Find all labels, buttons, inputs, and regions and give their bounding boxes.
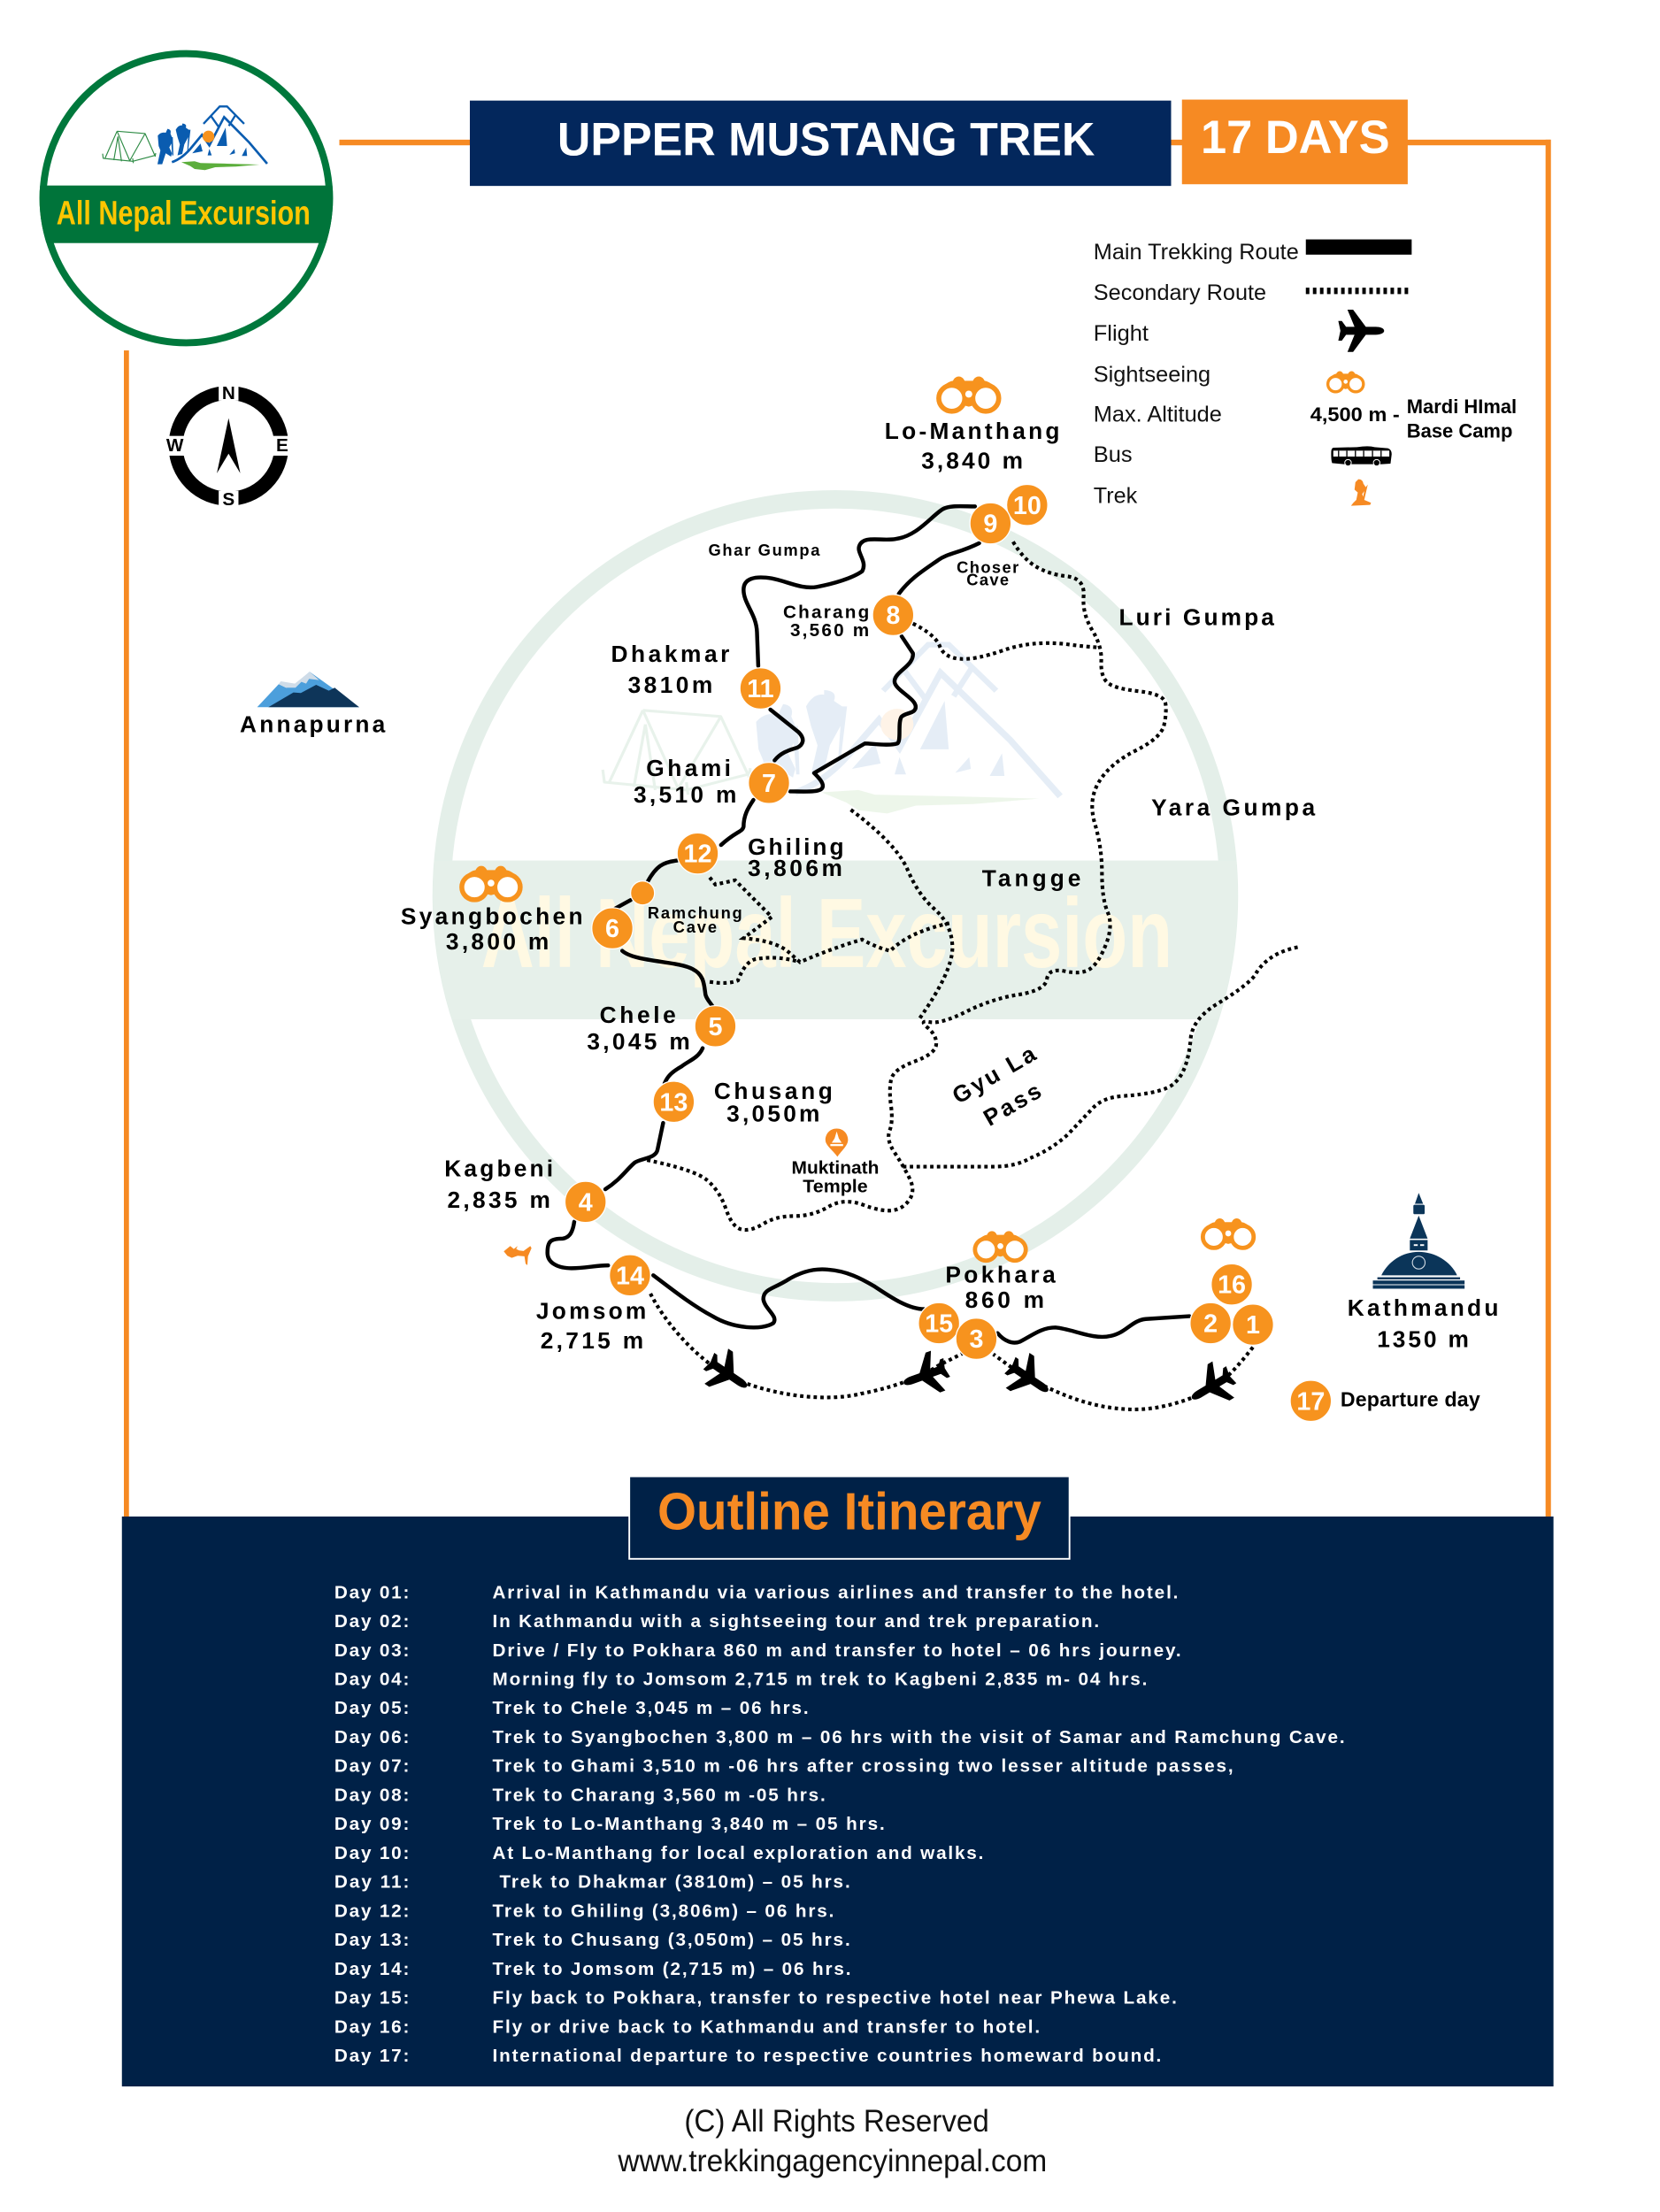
itinerary rows: Trek to Ghiling (3,806m) – 06 hrs. bbox=[493, 1901, 834, 1921]
map labels: Cave bbox=[673, 918, 717, 936]
watermark logo: All Nepal Excursion bbox=[481, 878, 1172, 988]
compass bbox=[165, 382, 290, 510]
itinerary rows: Day 02: bbox=[334, 1611, 409, 1632]
footer: www.trekkingagencyinnepal.com bbox=[617, 2144, 1047, 2178]
title banner bbox=[470, 101, 1171, 186]
itinerary rows: Trek to Chele 3,045 m – 06 hrs. bbox=[493, 1698, 809, 1718]
map labels: Gyu La bbox=[948, 1039, 1042, 1109]
map labels: Charang bbox=[783, 602, 869, 622]
duration badge bbox=[1182, 100, 1408, 184]
map labels: Dhakmar bbox=[611, 641, 729, 667]
map labels: Chele bbox=[600, 1002, 676, 1028]
map labels: 3,800 m bbox=[446, 928, 549, 955]
map labels: 2,835 m bbox=[447, 1187, 550, 1213]
itinerary rows: Day 04: bbox=[334, 1669, 409, 1689]
map labels: Lo-Manthang bbox=[885, 418, 1060, 444]
itinerary rows: Day 12: bbox=[334, 1901, 409, 1921]
map: secondary routes bbox=[645, 541, 1301, 1230]
map labels: 3810m bbox=[628, 672, 712, 698]
duration badge: 17 DAYS bbox=[1201, 111, 1390, 164]
icons: planes bbox=[697, 1343, 1242, 1417]
day markers: 4 bbox=[579, 1188, 593, 1217]
icon: Muktinath temple pin bbox=[826, 1129, 848, 1156]
map labels: 860 m bbox=[965, 1286, 1044, 1313]
map labels: Departure day bbox=[1341, 1388, 1480, 1411]
day markers: 14 bbox=[616, 1262, 644, 1290]
itinerary rows: Trek to Syangbochen 3,800 m – 06 hrs with the visit of Samar and Ramchung Cave. bbox=[493, 1727, 1345, 1747]
compass: S bbox=[222, 489, 234, 510]
compass: E bbox=[276, 435, 288, 456]
logo: All Nepal Excursion bbox=[36, 54, 336, 342]
itinerary rows: Day 10: bbox=[334, 1843, 409, 1863]
itinerary rows: Trek to Lo-Manthang 3,840 m – 05 hrs. bbox=[493, 1814, 885, 1834]
legend: Secondary Route bbox=[1094, 281, 1266, 305]
orange frame lines bbox=[124, 140, 1551, 1517]
day markers: 8 bbox=[886, 602, 900, 630]
map labels: Muktinath bbox=[792, 1158, 879, 1179]
map labels: Chusang bbox=[714, 1078, 833, 1104]
day markers: 11 bbox=[747, 675, 774, 703]
icon: bus bbox=[1331, 446, 1392, 466]
itinerary rows: Morning fly to Jomsom 2,715 m trek to Kagbeni 2,835 m- 04 hrs. bbox=[493, 1669, 1147, 1689]
day markers: 17 bbox=[1296, 1387, 1325, 1416]
itinerary heading: Outline Itinerary bbox=[657, 1482, 1041, 1540]
panel: outline itinerary bbox=[122, 1477, 1554, 2086]
itinerary rows: Day 11: bbox=[334, 1872, 409, 1893]
map labels: Tangge bbox=[982, 864, 1080, 891]
map labels: Yara Gumpa bbox=[1151, 795, 1315, 821]
map labels: 3,560 m bbox=[790, 620, 869, 641]
day markers: 13 bbox=[659, 1088, 688, 1117]
day markers: 5 bbox=[708, 1013, 722, 1041]
map labels bbox=[240, 418, 1480, 1411]
itinerary rows: Day 16: bbox=[334, 2016, 409, 2037]
legend bbox=[1094, 240, 1517, 508]
day markers bbox=[565, 485, 1332, 1422]
itinerary rows: Day 06: bbox=[334, 1727, 409, 1747]
map labels: Jomsom bbox=[536, 1298, 646, 1325]
itinerary rows: Fly back to Pokhara, transfer to respective hotel near Phewa Lake. bbox=[493, 1988, 1177, 2008]
itinerary rows bbox=[334, 1582, 1345, 2066]
day markers: 9 bbox=[983, 511, 997, 539]
day markers: 6 bbox=[605, 915, 619, 943]
compass: N bbox=[222, 383, 235, 403]
itinerary rows: Day 09: bbox=[334, 1814, 409, 1834]
legend: Bus bbox=[1094, 443, 1133, 467]
itinerary heading bbox=[629, 1477, 1070, 1559]
itinerary rows: In Kathmandu with a sightseeing tour and trek preparation. bbox=[493, 1611, 1099, 1632]
footer bbox=[617, 2104, 1047, 2178]
icons: sightseeing binoculars bbox=[460, 376, 1255, 1261]
itinerary rows: Day 15: bbox=[334, 1988, 409, 2008]
logo: All Nepal Excursion: All Nepal Excursion bbox=[57, 195, 311, 233]
map labels: Pass bbox=[979, 1076, 1048, 1132]
day markers: 10 bbox=[1013, 492, 1041, 520]
itinerary rows: Day 17: bbox=[334, 2046, 409, 2066]
itinerary rows: Day 03: bbox=[334, 1640, 409, 1661]
footer: (C) All Rights Reserved bbox=[684, 2104, 989, 2139]
icon: Annapurna mountains bbox=[257, 672, 359, 707]
day markers: 3 bbox=[969, 1325, 983, 1354]
itinerary rows: Day 13: bbox=[334, 1930, 409, 1950]
compass: W bbox=[166, 435, 184, 456]
day markers: 7 bbox=[762, 770, 776, 798]
itinerary rows: Trek to Chusang (3,050m) – 05 hrs. bbox=[493, 1930, 850, 1950]
itinerary rows: Day 07: bbox=[334, 1756, 409, 1777]
itinerary rows: Day 01: bbox=[334, 1582, 409, 1602]
map: flight routes bbox=[650, 1294, 1253, 1409]
map labels: 3,510 m bbox=[634, 781, 736, 808]
map labels: Annapurna bbox=[240, 710, 386, 737]
map labels: 2,715 m bbox=[541, 1327, 643, 1354]
legend: 4,500 m - bbox=[1310, 403, 1400, 426]
legend: Sightseeing bbox=[1094, 363, 1210, 387]
itinerary rows: Trek to Jomsom (2,715 m) – 06 hrs. bbox=[493, 1959, 851, 1979]
map labels: 3,806m bbox=[748, 855, 842, 881]
map labels: Luri Gumpa bbox=[1118, 603, 1274, 630]
itinerary rows: Day 08: bbox=[334, 1785, 409, 1805]
itinerary rows: Day 05: bbox=[334, 1698, 409, 1718]
map labels: 3,840 m bbox=[921, 447, 1023, 473]
Kathmandu stupa and label: Kathmandu bbox=[1348, 1294, 1498, 1321]
map labels: Temple bbox=[803, 1176, 868, 1196]
day markers: 1 bbox=[1246, 1311, 1260, 1340]
icon: climber bbox=[503, 1246, 532, 1265]
title banner: UPPER MUSTANG TREK bbox=[557, 113, 1095, 165]
watermark logo bbox=[434, 499, 1237, 1292]
map labels: Cave bbox=[966, 571, 1009, 589]
itinerary rows: Trek to Dhakmar (3810m) – 05 hrs. bbox=[499, 1872, 850, 1893]
map labels: Ghiling bbox=[748, 833, 844, 860]
legend: Max. Altitude bbox=[1094, 403, 1222, 427]
legend: Mardi HImal bbox=[1407, 396, 1517, 418]
itinerary rows: Trek to Charang 3,560 m -05 hrs. bbox=[493, 1785, 826, 1805]
map labels: Ghami bbox=[646, 755, 731, 781]
map labels: Pokhara bbox=[945, 1261, 1056, 1287]
map labels: Ramchung bbox=[648, 903, 742, 922]
itinerary rows: International departure to respective countries homeward bound. bbox=[493, 2046, 1161, 2066]
map labels: Choser bbox=[957, 557, 1018, 576]
itinerary rows: Fly or drive back to Kathmandu and transfer to hotel. bbox=[493, 2016, 1040, 2037]
day markers: 2 bbox=[1203, 1310, 1218, 1339]
legend: Base Camp bbox=[1407, 419, 1512, 442]
itinerary rows: Trek to Ghami 3,510 m -06 hrs after crossing two lesser altitude passes, bbox=[493, 1756, 1233, 1777]
day markers: 15 bbox=[925, 1310, 953, 1339]
map labels: Ghar Gumpa bbox=[708, 541, 820, 559]
map: main trekking routes bbox=[548, 506, 1189, 1342]
itinerary rows: Day 14: bbox=[334, 1959, 409, 1979]
Kathmandu stupa and label bbox=[1348, 1193, 1498, 1353]
itinerary rows: Drive / Fly to Pokhara 860 m and transfer to hotel – 06 hrs journey. bbox=[493, 1640, 1181, 1661]
itinerary rows: At Lo-Manthang for local exploration and walks. bbox=[493, 1843, 983, 1863]
legend: Main Trekking Route bbox=[1094, 241, 1299, 265]
map labels: 3,045 m bbox=[587, 1028, 690, 1055]
itinerary rows: Arrival in Kathmandu via various airlines and transfer to the hotel. bbox=[493, 1582, 1178, 1602]
day markers: 16 bbox=[1218, 1271, 1246, 1300]
legend: Trek bbox=[1094, 484, 1138, 508]
icon: trekker bbox=[1351, 480, 1371, 506]
map labels: Kagbeni bbox=[444, 1156, 553, 1182]
map labels: Syangbochen bbox=[401, 902, 583, 929]
map labels: 3,050m bbox=[726, 1101, 819, 1127]
day markers: 12 bbox=[684, 841, 711, 869]
legend: Flight bbox=[1094, 322, 1149, 346]
Kathmandu stupa and label: 1350 m bbox=[1377, 1326, 1469, 1353]
